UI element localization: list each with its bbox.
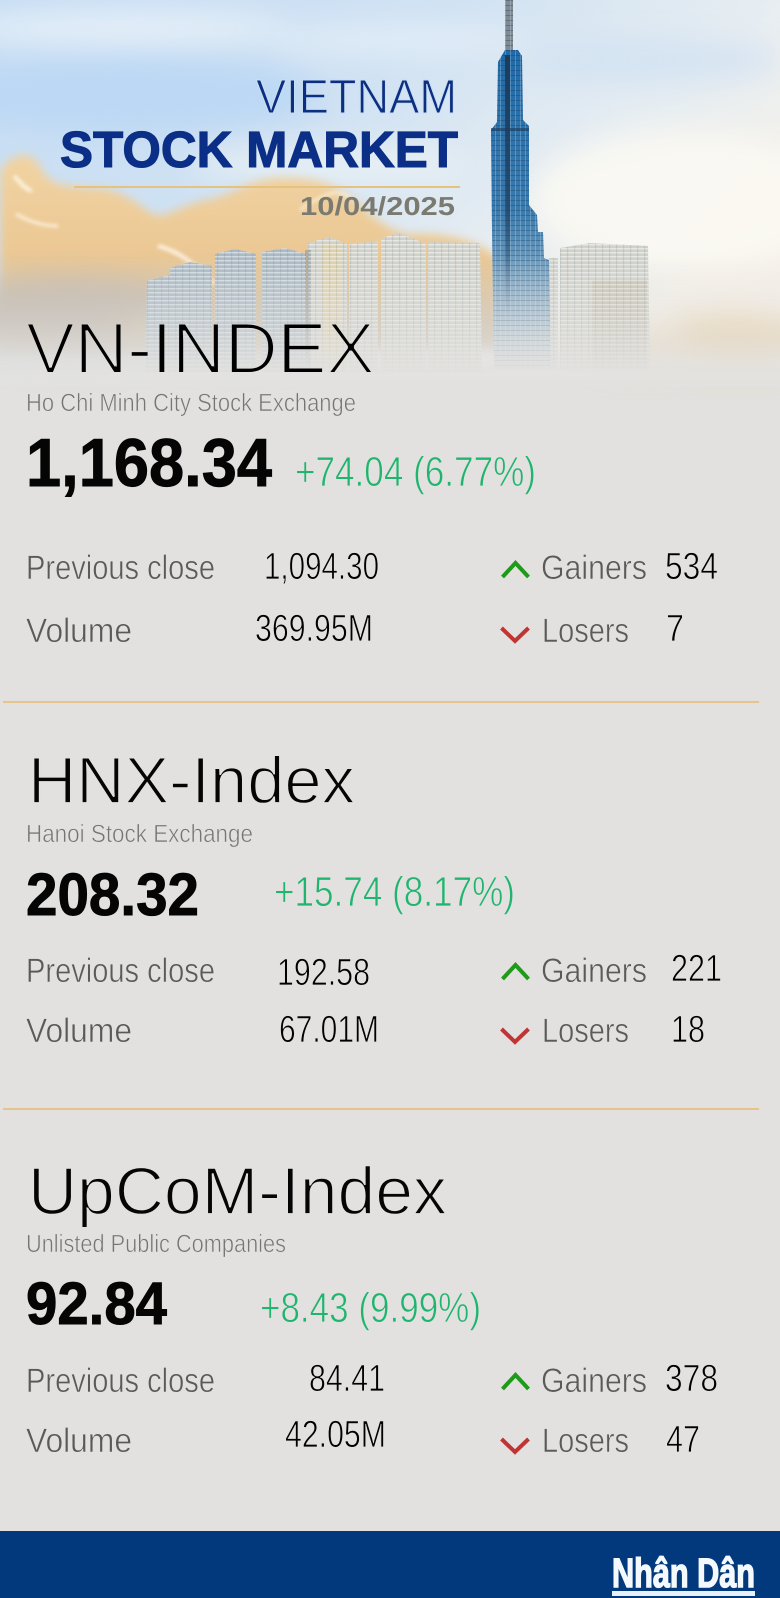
gainers label: Gainers [541, 549, 647, 587]
index value: 208.32 [26, 861, 199, 928]
title [60, 71, 458, 178]
Landmark 81 tower [491, 0, 551, 370]
index name: HNX-Index [28, 743, 355, 817]
previous close value: 192.58 [277, 952, 370, 994]
gainers label: Gainers [541, 952, 647, 990]
change: +74.04 (6.77%) [295, 448, 536, 495]
previous close label: Previous close [26, 1362, 215, 1400]
cloud bank [0, 155, 500, 350]
volume label: Volume [26, 612, 132, 650]
title rule [74, 186, 460, 188]
volume value: 369.95M [255, 608, 373, 650]
losers value: 18 [671, 1009, 705, 1051]
date: 10/04/2025 [300, 191, 455, 221]
index value: 92.84 [26, 1270, 168, 1337]
index value: 1,168.34 [26, 425, 272, 501]
gainers value: 534 [665, 546, 718, 588]
change: +15.74 (8.17%) [274, 868, 515, 915]
title line: STOCK MARKET: STOCK MARKET [60, 121, 458, 178]
icon: gainers arrow [502, 563, 528, 577]
gainers label: Gainers [541, 1362, 647, 1400]
previous close label: Previous close [26, 952, 215, 990]
panel: UpCoM-Index [26, 1154, 718, 1461]
icon: gainers arrow [502, 1375, 528, 1389]
icon: losers arrow [502, 1439, 528, 1452]
previous close value: 1,094.30 [264, 546, 379, 588]
title line: VIETNAM: VIETNAM [256, 71, 457, 124]
volume label: Volume [26, 1012, 132, 1050]
icon: gainers arrow [502, 965, 528, 979]
volume value: 42.05M [285, 1414, 386, 1456]
residential towers [146, 233, 650, 364]
previous close label: Previous close [26, 549, 215, 587]
header photo: sky, clouds and skyline [0, 0, 780, 387]
previous close value: 84.41 [309, 1358, 385, 1400]
volume value: 67.01M [279, 1009, 379, 1051]
exchange name: Ho Chi Minh City Stock Exchange [26, 389, 356, 417]
volume label: Volume [26, 1422, 132, 1460]
index name: UpCoM-Index [28, 1154, 447, 1229]
losers value: 47 [666, 1419, 700, 1461]
gainers value: 221 [671, 948, 722, 990]
losers label: Losers [542, 1012, 629, 1050]
footer band [0, 1531, 780, 1598]
index name: VN-INDEX [26, 309, 375, 389]
change: +8.43 (9.99%) [260, 1284, 481, 1331]
panel: VN-Index [26, 309, 718, 650]
icon: losers arrow [502, 628, 528, 641]
exchange name: Hanoi Stock Exchange [26, 820, 253, 848]
icon: losers arrow [502, 1029, 528, 1042]
panel: HNX-Index [26, 743, 722, 1051]
losers label: Losers [542, 612, 629, 650]
losers value: 7 [666, 608, 684, 650]
exchange name: Unlisted Public Companies [26, 1230, 286, 1258]
losers label: Losers [542, 1422, 629, 1460]
gainers value: 378 [665, 1358, 718, 1400]
